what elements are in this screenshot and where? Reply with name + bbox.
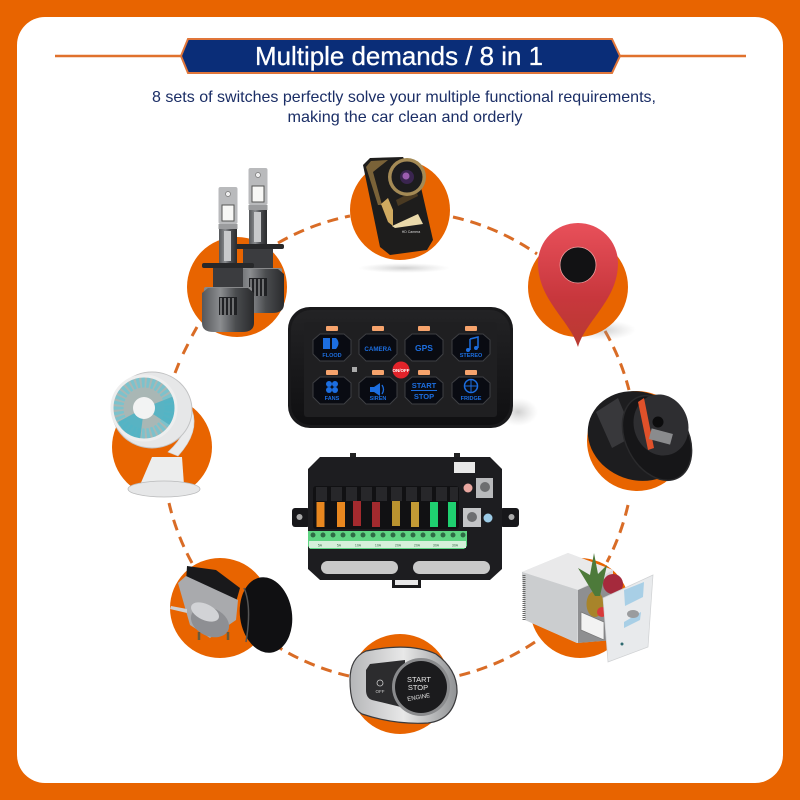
dashed ring segment: fan to bulbs — [175, 327, 197, 373]
power button — [352, 367, 357, 372]
item: clip fan — [112, 372, 212, 497]
switch labels: STOP — [414, 392, 434, 401]
fuse box: 10A — [355, 544, 362, 548]
title banner — [55, 39, 746, 73]
item: dash camera — [350, 157, 450, 273]
subtitle — [152, 89, 656, 126]
fuse holders — [316, 487, 458, 501]
title banner: Multiple demands / 8 in 1 — [255, 41, 543, 71]
item: car horn — [170, 558, 297, 658]
switch buttons — [313, 334, 490, 404]
switch labels: START — [412, 381, 437, 390]
subtitle: making the car clean and orderly — [288, 109, 522, 126]
fuse box: 20A — [395, 544, 402, 548]
item: GPS location pin — [528, 223, 636, 347]
item: start stop button: START — [407, 675, 431, 684]
fuse box: 5A — [337, 544, 342, 548]
fuse box: 10A — [375, 544, 382, 548]
dashed connector ring — [169, 216, 629, 676]
fuse box: 5A — [318, 544, 323, 548]
switch labels: SIREN — [370, 396, 386, 402]
switch labels: STEREO — [460, 353, 483, 359]
fuse box — [292, 453, 519, 588]
switch control panel — [288, 307, 538, 428]
switch labels: FRIDGE — [461, 396, 482, 402]
item: dash camera: HD Camera — [402, 230, 420, 234]
item: start stop button: OFF — [376, 689, 385, 694]
subtitle: 8 sets of switches perfectly solve your multiple functional requirements, — [152, 89, 656, 106]
switch icons — [323, 337, 478, 396]
switch labels: FANS — [325, 396, 340, 402]
item: portable fridge — [522, 553, 653, 662]
indicator LEDs — [326, 326, 477, 375]
fuse box: 20A — [414, 544, 421, 548]
mounting slots — [321, 561, 398, 574]
item: start stop button — [350, 634, 457, 734]
item: LED headlight bulbs — [187, 168, 287, 337]
power connector and lugs — [454, 462, 475, 473]
item: start stop button: STOP — [408, 683, 428, 692]
switch labels: GPS — [415, 343, 433, 353]
fuse box: 30A — [433, 544, 440, 548]
blade fuses — [316, 501, 456, 527]
switch control panel: ON/OFF — [392, 368, 410, 373]
terminal strip — [308, 531, 467, 549]
switch labels: CAMERA — [364, 346, 392, 353]
switch labels — [322, 343, 483, 402]
fuse box: 30A — [452, 544, 459, 548]
switch labels: FLOOD — [322, 353, 342, 359]
pineapple — [578, 553, 623, 617]
item: start stop button: ENGINE — [407, 693, 431, 703]
item: stereo speaker — [575, 377, 705, 495]
